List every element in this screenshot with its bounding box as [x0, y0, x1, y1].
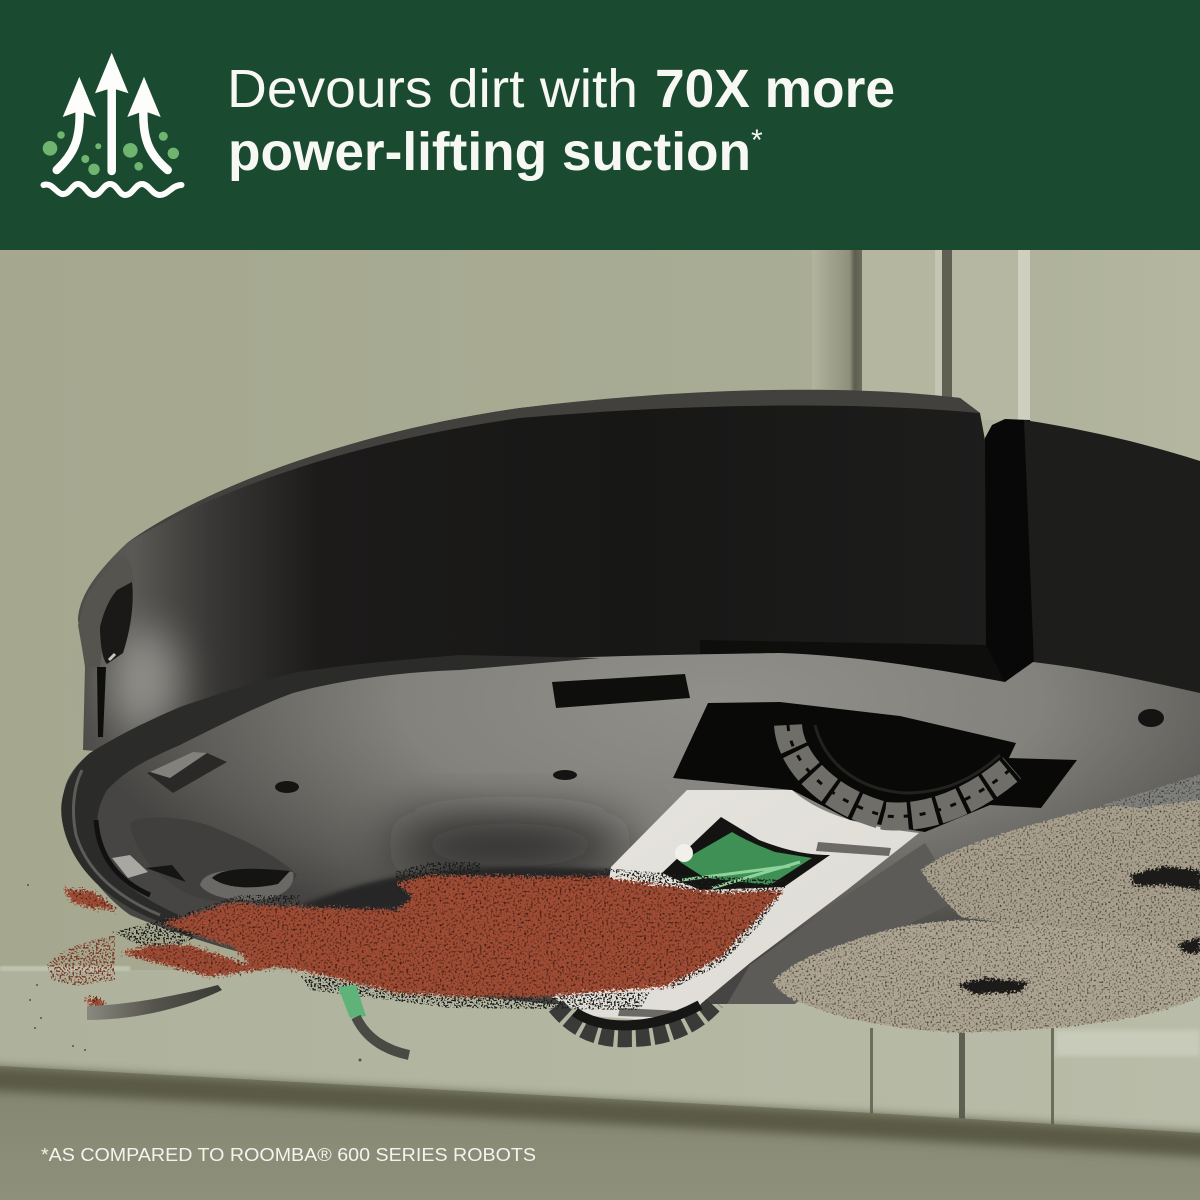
debris: fine scatter: [27, 884, 362, 1062]
white dust bin: [552, 790, 919, 1022]
grey shade beside bin: [727, 843, 960, 1004]
headline: [227, 59, 895, 182]
lid top edge: [127, 390, 980, 543]
pad dirt patches: [957, 866, 1200, 994]
robot body side wall: [78, 391, 1005, 760]
background: kitchen cabinets: [0, 250, 1200, 1200]
debris: dark specks: [112, 862, 790, 1010]
debris: loose red scatter: [47, 935, 115, 986]
footnote: *AS COMPARED TO ROOMBA® 600 SERIES ROBOTS: [41, 1145, 536, 1165]
drive wheel tread: [788, 725, 1012, 817]
bumper sensor: [112, 855, 148, 878]
robot underside plate: [63, 653, 1200, 1004]
mop pad lower: [773, 920, 1200, 1033]
lower wheel: [556, 1002, 716, 1038]
headline: 70X more: [655, 59, 895, 119]
side brush left: [87, 985, 222, 1020]
wheel well: [673, 702, 1077, 832]
soft dark reflection: [390, 821, 630, 869]
shadow above dirt: [300, 867, 620, 930]
side highlight: [109, 628, 181, 732]
rectangular slot: [552, 674, 690, 708]
side button recess: [78, 556, 133, 737]
green brush window: [662, 817, 830, 890]
robot vacuum: [27, 390, 1200, 1062]
mop pad upper: [921, 795, 1200, 970]
debris: red dirt sweep: [63, 875, 784, 1008]
side brush right: [338, 985, 409, 1055]
headline: *: [751, 124, 763, 157]
headline: Devours dirt with: [227, 59, 638, 119]
bin slots: [618, 842, 891, 1018]
headline: power-lifting suction: [228, 122, 751, 182]
dark wedge under lid: [700, 640, 1005, 682]
mop pad dark end: [1104, 775, 1200, 808]
rear tower front: [1024, 420, 1200, 700]
icon: suction arrows lifting dirt: [43, 53, 182, 195]
header band: [0, 0, 1200, 250]
corner sensor: [147, 752, 227, 793]
caster recess: [130, 817, 297, 902]
screw holes: [275, 709, 1164, 994]
rear tower gap: [985, 419, 1040, 690]
plate rim: [61, 655, 600, 937]
